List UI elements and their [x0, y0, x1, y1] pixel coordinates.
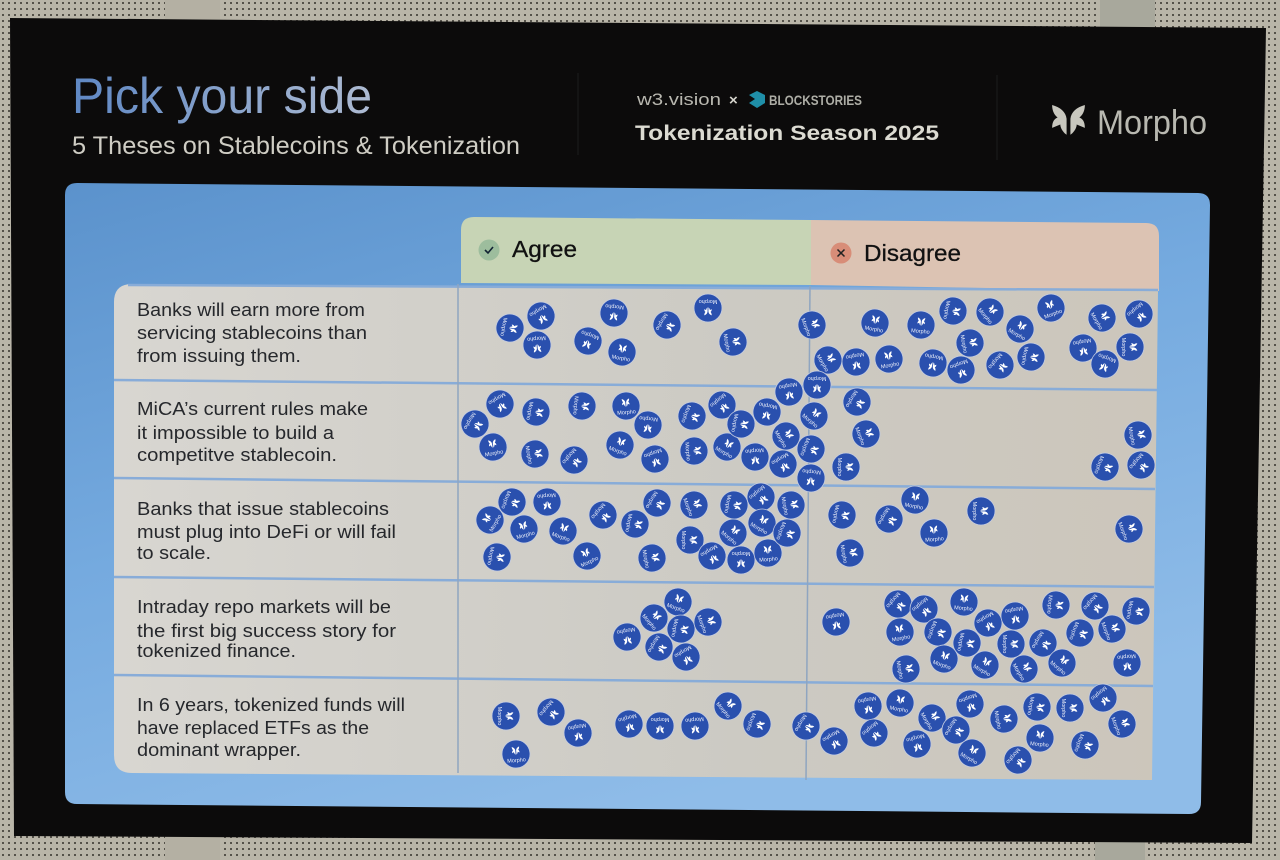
- stickers: thesis 3 agree: Morpho: [624, 513, 633, 532]
- stickers: thesis 1 disagree: Morpho: [949, 357, 968, 369]
- thesis 2: it impossible to build a: [137, 423, 335, 443]
- thesis 3: must plug into DeFi or will fail: [137, 522, 396, 542]
- stickers: thesis 4 disagree: [820, 584, 1152, 688]
- stickers: thesis 5 agree: Morpho: [744, 712, 756, 731]
- stickers: thesis 3 agree: Morpho: [774, 521, 786, 540]
- stickers: thesis 4 disagree: Morpho: [1125, 600, 1134, 619]
- stickers: thesis 2 agree: Morpho: [525, 401, 534, 420]
- stickers: thesis 3 agree: [471, 477, 807, 575]
- stickers: thesis 3 agree: Morpho: [486, 546, 495, 565]
- stickers: thesis 4 disagree: Morpho: [892, 634, 911, 643]
- stickers: thesis 5 disagree: Morpho: [1004, 746, 1021, 765]
- stickers: thesis 5 disagree: Morpho: [1060, 699, 1066, 717]
- disagree header: [811, 220, 1159, 291]
- stickers: thesis 5 agree: Morpho: [685, 715, 704, 723]
- stickers: thesis 1 agree: Morpho: [654, 312, 668, 331]
- stickers: thesis 3 disagree: Morpho: [971, 502, 977, 520]
- stickers: thesis 5 disagree: Morpho: [919, 712, 933, 731]
- stickers: thesis 1 agree: Morpho: [722, 334, 731, 353]
- stickers: thesis 5 agree: Morpho: [537, 698, 554, 717]
- agree header: Agree: [512, 236, 577, 262]
- stickers: thesis 3 agree: Morpho: [719, 530, 738, 547]
- stickers: thesis 2 agree: Morpho: [714, 446, 733, 460]
- stickers: thesis 3 agree: Morpho: [580, 556, 600, 569]
- thesis 3: [137, 499, 396, 563]
- stickers: thesis 1 agree: Morpho: [527, 334, 546, 342]
- stickers: thesis 4 disagree: Morpho: [954, 605, 973, 613]
- stickers: thesis 1 disagree: Morpho: [1020, 346, 1029, 365]
- stickers: thesis 2 agree: Morpho: [773, 430, 787, 449]
- stickers: thesis 5 agree: Morpho: [496, 707, 502, 725]
- stickers: thesis 5 disagree: Morpho: [1109, 717, 1121, 736]
- thesis 1: servicing stablecoins than: [137, 323, 367, 343]
- stickers: thesis 1 agree: Morpho: [611, 354, 630, 363]
- stickers: thesis 1 disagree: Morpho: [976, 307, 993, 326]
- stickers: thesis 2 agree: Morpho: [617, 409, 636, 417]
- title: Pick your side: [72, 68, 372, 124]
- thesis 3: to scale.: [137, 543, 211, 563]
- stickers: thesis 3 agree: Morpho: [723, 494, 732, 513]
- stickers: thesis 5 agree: Morpho: [507, 757, 526, 765]
- stickers: thesis 2 agree: Morpho: [560, 446, 577, 465]
- stickers: thesis 5 agree: Morpho: [793, 713, 807, 732]
- stickers: thesis 4 disagree: Morpho: [975, 610, 994, 624]
- stickers: thesis 4 disagree: Morpho: [895, 661, 904, 680]
- stickers: thesis 3 agree: Morpho: [641, 550, 650, 569]
- stickers: thesis 2 agree: Morpho: [683, 442, 691, 461]
- stickers: thesis 4 disagree: Morpho: [910, 595, 929, 612]
- stickers: thesis 3 agree: Morpho: [732, 550, 750, 556]
- stickers: thesis 5 agree: Morpho: [567, 722, 586, 731]
- stickers: thesis 2 agree: Morpho: [639, 414, 658, 422]
- stickers: thesis 1 disagree: Morpho: [911, 328, 930, 336]
- stickers: thesis 4 disagree: Morpho: [932, 660, 951, 672]
- thesis 5: In 6 years, tokenized funds will: [137, 695, 405, 715]
- thesis 2: competitve stablecoin.: [137, 445, 337, 465]
- stickers: thesis 1 disagree: Morpho: [864, 325, 883, 334]
- stickers: thesis 4 disagree: Morpho: [925, 620, 937, 639]
- stickers: thesis 2 agree: Morpho: [643, 446, 662, 458]
- stickers: thesis 1 disagree: Morpho: [1125, 300, 1144, 317]
- stickers: thesis 4 agree: Morpho: [616, 626, 635, 635]
- stickers: thesis 5 disagree: Morpho: [993, 711, 1002, 730]
- stickers: thesis 2 agree: Morpho: [759, 401, 778, 410]
- stickers: thesis 4 agree: Morpho: [640, 613, 657, 632]
- stickers: thesis 5 disagree: Morpho: [857, 695, 876, 704]
- table body: [114, 284, 1158, 780]
- stickers: thesis 2 disagree: Morpho: [1092, 455, 1104, 474]
- Morpho logo: [1052, 104, 1207, 142]
- stickers: thesis 4 agree: Morpho: [673, 644, 692, 658]
- stickers: thesis 3 disagree: [826, 484, 1147, 569]
- stickers: thesis 3 agree: Morpho: [551, 532, 570, 544]
- stickers: thesis 1 disagree: Morpho: [845, 351, 864, 360]
- stickers: thesis 5 agree: Morpho: [617, 712, 637, 723]
- stickers: thesis 5 disagree: Morpho: [1089, 684, 1108, 701]
- stickers: thesis 5 disagree: Morpho: [1026, 696, 1035, 715]
- stickers: thesis 2 agree: Morpho: [844, 389, 858, 408]
- stickers: thesis 3 agree: Morpho: [644, 490, 658, 509]
- stickers: thesis 2 agree: Morpho: [808, 375, 826, 381]
- stickers: thesis 5 disagree: Morpho: [860, 719, 879, 736]
- stickers: thesis 4 disagree: Morpho: [1030, 630, 1044, 649]
- stickers: thesis 2 disagree: Morpho: [1127, 427, 1136, 446]
- stickers: thesis 5 disagree: Morpho: [958, 691, 977, 703]
- stickers: thesis 4 disagree: Morpho: [1067, 621, 1079, 640]
- stickers: thesis 5 disagree: [815, 678, 1140, 780]
- stickers: thesis 2 agree: Morpho: [802, 467, 821, 475]
- stickers: thesis 1 disagree: Morpho: [942, 300, 951, 319]
- thesis 1: Banks will earn more from: [137, 300, 365, 320]
- stickers: thesis 1 agree: Morpho: [528, 303, 547, 317]
- stickers: thesis 4 agree: Morpho: [695, 615, 707, 634]
- stickers: thesis 2 agree: Morpho: [778, 381, 797, 390]
- stickers: thesis 5 disagree: Morpho: [821, 728, 840, 742]
- stickers: thesis 1 agree: Morpho: [581, 328, 600, 340]
- agree header: [461, 217, 811, 285]
- stickers: thesis 3 agree: Morpho: [749, 522, 768, 536]
- event partners logos: [636, 90, 862, 109]
- stickers: thesis 4 disagree: Morpho: [972, 664, 991, 678]
- stickers: thesis 1 disagree: Morpho: [1044, 309, 1063, 321]
- stickers: thesis 2 disagree: [1087, 419, 1161, 485]
- stickers: thesis 5 disagree: Morpho: [943, 717, 957, 736]
- stickers: thesis 5 disagree: Morpho: [1072, 733, 1084, 752]
- thesis 4: the first big success story for: [137, 621, 396, 641]
- event partners logos: BLOCKSTORIES: [769, 92, 862, 108]
- stickers: thesis 1 disagree: Morpho: [925, 352, 944, 361]
- stickers: thesis 1 agree: [494, 294, 830, 368]
- thesis 2: MiCA’s current rules make: [137, 399, 368, 419]
- stickers: thesis 2 agree: Morpho: [487, 391, 506, 405]
- stickers: thesis 3 agree: Morpho: [489, 514, 503, 533]
- subtitle: 5 Theses on Stablecoins & Tokenization: [72, 132, 520, 160]
- stickers: thesis 2 agree: Morpho: [462, 411, 476, 430]
- stickers: thesis 2 agree: Morpho: [853, 427, 865, 446]
- stickers: thesis 5 disagree: Morpho: [905, 732, 925, 743]
- stickers: thesis 5 disagree: Morpho: [889, 705, 908, 714]
- stickers: thesis 5 disagree: Morpho: [1030, 741, 1049, 749]
- stickers: thesis 3 agree: Morpho: [589, 501, 606, 520]
- stickers: thesis 1 disagree: Morpho: [1089, 312, 1103, 331]
- stickers: thesis 2 agree: Morpho: [524, 446, 533, 465]
- stickers: thesis 4 agree: [611, 584, 726, 676]
- stickers: thesis 5 agree: [492, 686, 825, 769]
- stickers: thesis 4 disagree: Morpho: [825, 611, 844, 620]
- stickers: thesis 2 agree: [456, 371, 884, 493]
- stickers: thesis 1 disagree: [809, 290, 1159, 388]
- stickers: thesis 4 agree: Morpho: [670, 618, 679, 637]
- stickers: thesis 4 disagree: Morpho: [1004, 605, 1023, 614]
- stickers: thesis 4 disagree: Morpho: [1011, 663, 1025, 682]
- stickers: thesis 3 agree: Morpho: [499, 490, 511, 509]
- stickers: thesis 1 disagree: Morpho: [986, 351, 1003, 370]
- stickers: thesis 2 agree: Morpho: [679, 404, 691, 423]
- stickers: thesis 2 agree: Morpho: [730, 413, 739, 432]
- thesis 1: [137, 300, 367, 366]
- stickers: thesis 1 disagree: Morpho: [1098, 351, 1117, 363]
- stickers: thesis 3 disagree: Morpho: [904, 502, 923, 511]
- stickers: thesis 5 agree: Morpho: [714, 701, 731, 720]
- stickers: thesis 4 disagree: Morpho: [956, 632, 965, 651]
- thesis 2: [137, 399, 368, 465]
- thesis 4: [137, 597, 396, 661]
- thesis 1: from issuing them.: [137, 346, 301, 366]
- stickers: thesis 4 disagree: Morpho: [1117, 652, 1136, 660]
- stickers: thesis 2 disagree: Morpho: [1127, 451, 1144, 470]
- stickers: thesis 2 agree: Morpho: [836, 458, 842, 476]
- stickers: thesis 1 disagree: Morpho: [1007, 328, 1026, 342]
- event name: Tokenization Season 2025: [635, 122, 939, 145]
- thesis 5: have replaced ETFs as the: [137, 718, 369, 738]
- stickers: thesis 1 disagree: Morpho: [881, 361, 900, 370]
- event partners logos: w3.vision: [636, 90, 721, 109]
- event partners logos: ×: [729, 92, 738, 109]
- stickers: thesis 3 agree: Morpho: [681, 498, 693, 517]
- stickers: thesis 3 agree: Morpho: [747, 483, 766, 500]
- stickers: thesis 1 agree: Morpho: [605, 302, 624, 310]
- stickers: thesis 3 disagree: Morpho: [839, 545, 848, 564]
- stickers: thesis 3 agree: Morpho: [699, 543, 718, 557]
- stickers: thesis 5 disagree: Morpho: [959, 752, 978, 766]
- stickers: thesis 3 agree: Morpho: [516, 530, 536, 541]
- stickers: thesis 2 agree: Morpho: [800, 413, 819, 430]
- thesis 5: dominant wrapper.: [137, 740, 301, 760]
- stickers: thesis 4 disagree: Morpho: [884, 590, 901, 609]
- stickers: thesis 3 disagree: Morpho: [876, 506, 890, 525]
- stickers: thesis 3 agree: Morpho: [759, 556, 778, 564]
- stickers: thesis 4 disagree: Morpho: [1045, 595, 1053, 614]
- stickers: thesis 2 agree: Morpho: [571, 396, 579, 415]
- stickers: thesis 2 agree: Morpho: [608, 446, 627, 458]
- stickers: thesis 3 agree: Morpho: [680, 531, 686, 549]
- disagree header: Disagree: [864, 240, 961, 266]
- stickers: thesis 3 agree: Morpho: [780, 497, 789, 516]
- blue panel: [65, 183, 1210, 814]
- stickers: thesis 2 agree: Morpho: [798, 437, 810, 456]
- stickers: thesis 2 agree: Morpho: [745, 446, 764, 454]
- stickers: thesis 3 agree: Morpho: [537, 491, 556, 499]
- stickers: thesis 2 agree: Morpho: [708, 391, 727, 408]
- stickers: thesis 1 disagree: Morpho: [959, 335, 968, 354]
- stickers: thesis 1 agree: Morpho: [799, 318, 811, 337]
- stickers: thesis 4 agree: Morpho: [666, 603, 685, 615]
- stickers: thesis 3 disagree: Morpho: [925, 536, 944, 544]
- stickers: thesis 4 disagree: Morpho: [1099, 622, 1111, 641]
- stickers: thesis 2 agree: Morpho: [485, 449, 504, 458]
- thesis 4: tokenized finance.: [137, 641, 296, 661]
- stickers: thesis 3 disagree: Morpho: [831, 504, 840, 523]
- stickers: thesis 1 disagree: Morpho: [1072, 337, 1091, 346]
- stickers: thesis 1 disagree: Morpho: [815, 354, 829, 373]
- Morpho logo: Morpho: [1097, 104, 1207, 142]
- thesis 4: Intraday repo markets will be: [137, 597, 391, 617]
- stickers: thesis 5 agree: Morpho: [651, 716, 669, 722]
- stickers: thesis 4 agree: Morpho: [646, 634, 660, 653]
- stickers: thesis 3 disagree: Morpho: [1116, 522, 1128, 541]
- thesis 3: Banks that issue stablecoins: [137, 499, 389, 519]
- stickers: thesis 1 agree: Morpho: [499, 317, 508, 336]
- stickers: thesis 4 disagree: Morpho: [1001, 635, 1007, 653]
- stickers: thesis 1 agree: Morpho: [699, 298, 717, 304]
- thesis 5: [137, 695, 405, 760]
- stickers: thesis 2 agree: Morpho: [770, 451, 789, 465]
- stickers: thesis 4 disagree: Morpho: [1081, 592, 1098, 611]
- stickers: thesis 4 disagree: Morpho: [1048, 660, 1067, 677]
- stickers: thesis 1 disagree: Morpho: [1120, 338, 1126, 356]
